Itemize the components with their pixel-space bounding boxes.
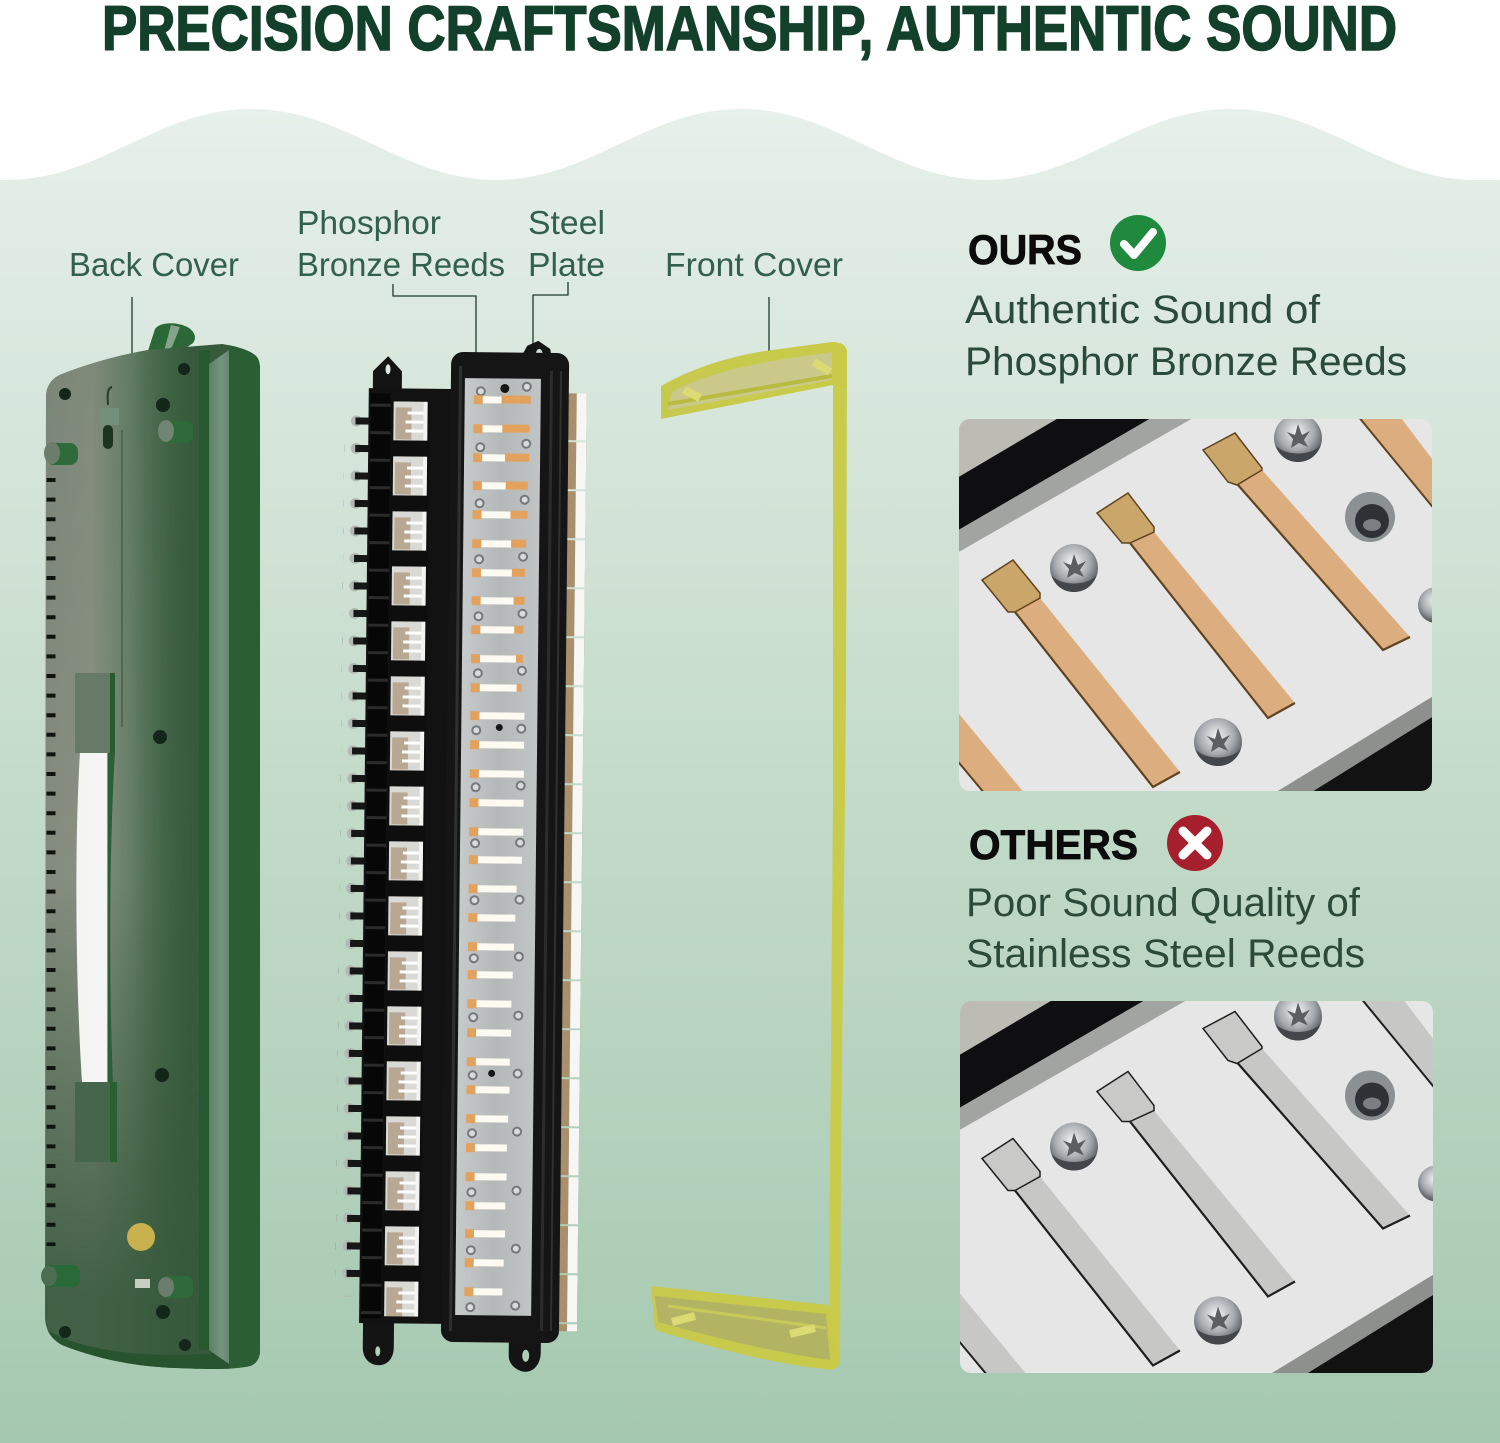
- steel plate: [455, 378, 541, 1316]
- comb teeth: [382, 401, 430, 1317]
- small switch window: [135, 1279, 150, 1288]
- label: steel plate: [528, 204, 605, 385]
- photo: stainless steel reeds close-up: [960, 1001, 1433, 1373]
- yellow button: [127, 1223, 155, 1251]
- back cover illustration: [40, 323, 261, 1375]
- outer reed frame: [441, 352, 569, 1343]
- reed screws: [466, 382, 531, 1312]
- heading: ours: OURS: [968, 226, 1082, 273]
- reeds: [464, 395, 531, 1297]
- text: ours description: Authentic Sound of: [965, 288, 1321, 332]
- label: phosphor bronze reeds: Phosphor: [297, 204, 441, 241]
- text: others description: Stainless Steel Reeds: [966, 932, 1365, 976]
- label: front cover: Front Cover: [665, 246, 843, 283]
- screw holes: [59, 363, 191, 1351]
- label: steel plate: Steel: [528, 204, 605, 241]
- text: others description: Poor Sound Quality of: [966, 881, 1361, 925]
- reed centre sections: [473, 396, 528, 1296]
- front cover illustration: [651, 342, 847, 1370]
- label: back cover: Back Cover: [69, 246, 239, 283]
- label: phosphor bronze reeds: Bronze Reeds: [297, 246, 505, 283]
- label: phosphor bronze reeds: [297, 204, 505, 405]
- comb body: [359, 388, 453, 1324]
- inner reed assembly: comb and steel plate: [335, 339, 587, 1372]
- handle strap: [75, 673, 117, 1162]
- mounting lugs: [363, 339, 553, 1372]
- icon: cross mark: [1167, 815, 1223, 871]
- text: ours description: Phosphor Bronze Reeds: [965, 340, 1407, 384]
- text: ours description: [965, 288, 1407, 384]
- reed tabs and copper ends: [464, 395, 531, 1297]
- pins on the comb: [335, 407, 375, 1297]
- heading: others: OTHERS: [969, 821, 1138, 868]
- white key blocks: [558, 393, 587, 1331]
- icon: check mark: [1110, 215, 1166, 271]
- label: steel plate: Plate: [528, 246, 605, 283]
- text: others description: [966, 881, 1365, 976]
- photo: phosphor bronze reeds close-up: [959, 419, 1432, 791]
- hanger hook: [99, 387, 119, 449]
- mounting pegs: [41, 420, 193, 1298]
